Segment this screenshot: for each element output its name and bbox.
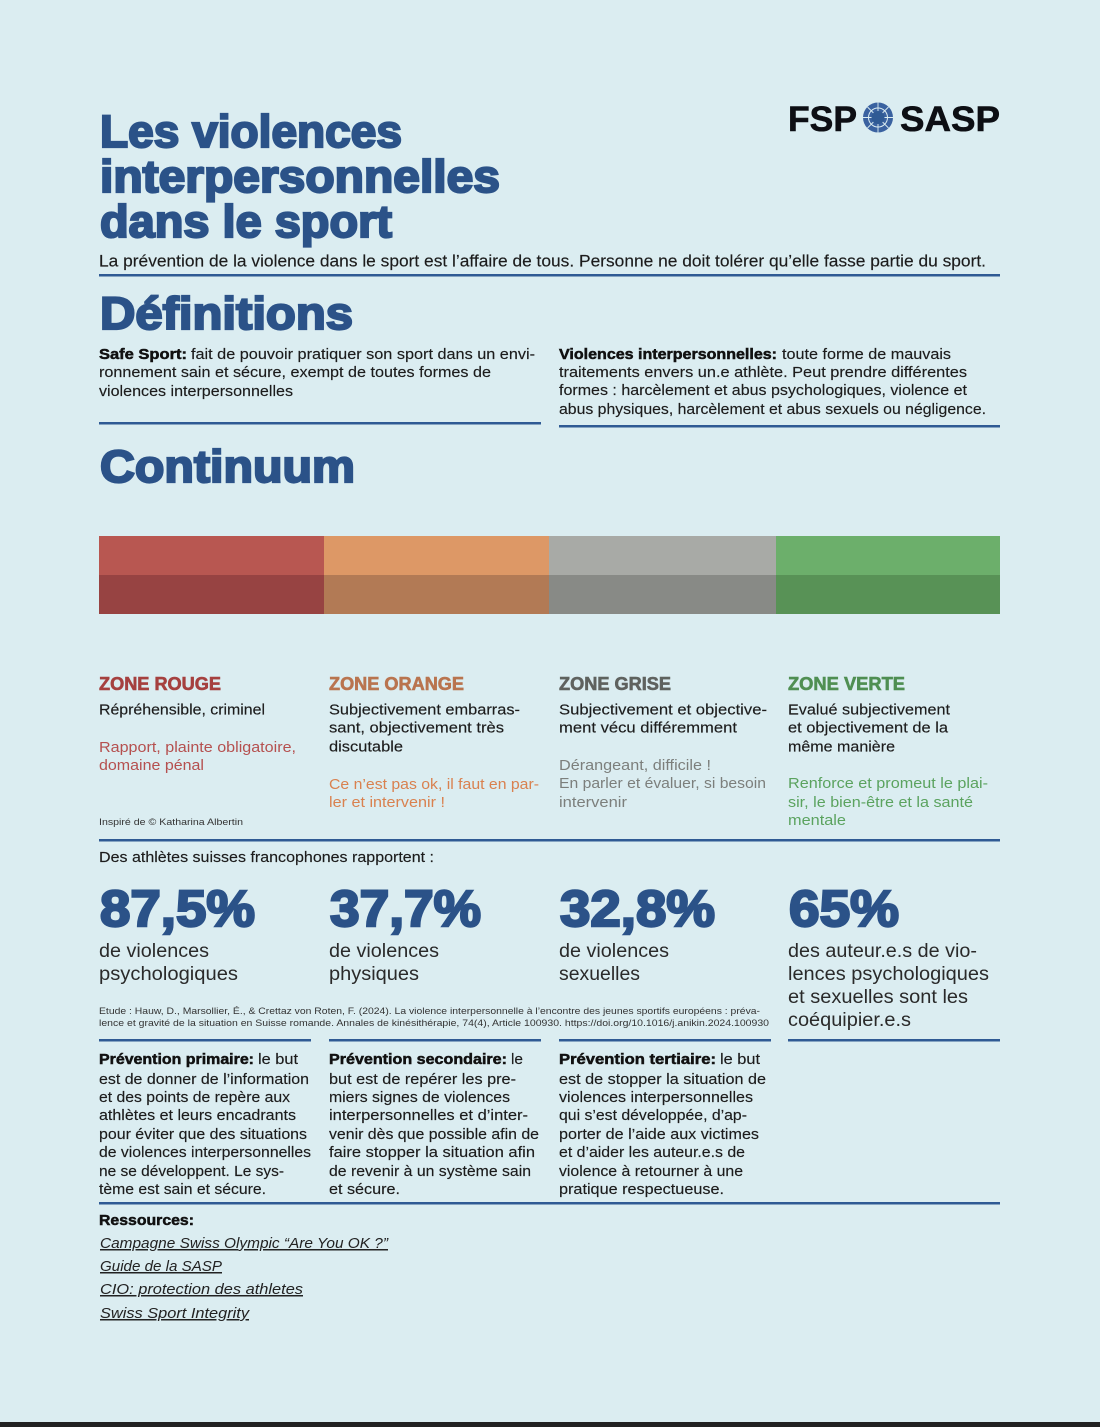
- stat: 65%: lences psychologiques: [788, 964, 989, 985]
- prévention secondaire: le: [511, 1051, 523, 1068]
- continuum colour bar: [99, 536, 1000, 614]
- stat: 65%: et sexuelles sont les: [788, 987, 968, 1008]
- stat: 65%: 65%: [789, 880, 899, 937]
- definition: Violences interpersonnelles: [559, 346, 986, 418]
- definition: Safe Sport: ronnement sain et sécure, exempt de toutes formes de: [99, 364, 491, 381]
- zone verte: même manière: [788, 738, 895, 756]
- stat: 87,5%: psychologiques: [99, 964, 238, 985]
- heading: Définitions: Définitions: [100, 288, 353, 339]
- zone rouge: Rapport, plainte obligatoire,: [99, 739, 296, 756]
- zone verte: et objectivement de la: [788, 720, 949, 736]
- definition: Violences interpersonnelles: formes : harcèlement et abus psychologiques, violence et: [559, 382, 968, 399]
- title: interpersonnelles: [100, 151, 500, 202]
- definition: Safe Sport: violences interpersonnelles: [99, 383, 293, 400]
- zone rouge: ZONE ROUGE: [99, 674, 221, 694]
- zone rouge: [99, 674, 296, 774]
- stat: 65%: coéquipier.e.s: [788, 1010, 911, 1031]
- resources: Ressources:: [99, 1212, 194, 1229]
- definition: Safe Sport: [99, 346, 535, 400]
- stat: 65%: des auteur.e.s de vio-: [788, 941, 977, 962]
- resources: Campagne Swiss Olympic “Are You OK ?”: [100, 1235, 389, 1252]
- zone verte: mentale: [788, 812, 846, 829]
- prévention tertiaire: et d’aider les auteur.e.s de: [559, 1144, 745, 1161]
- prévention secondaire: [329, 1051, 539, 1198]
- statistics intro: Des athlètes suisses francophones rapportent :: [99, 849, 434, 866]
- prévention tertiaire: [559, 1051, 766, 1198]
- resources: [99, 1212, 389, 1322]
- resources: Swiss Sport Integrity: [100, 1305, 251, 1322]
- zone verte: Evalué subjectivement: [788, 702, 951, 718]
- stat: 37,7%: 37,7%: [330, 880, 481, 937]
- title: Les violences: [100, 106, 402, 157]
- zone verte: ZONE VERTE: [788, 674, 905, 694]
- subtitle: La prévention de la violence dans le sport est l’affaire de tous. Personne ne doit tolérer qu’elle fasse partie du sport.: [99, 252, 986, 270]
- study citation: lence et gravité de la situation en Suisse romande. Annales de kinésithérapie, 74(4), Article 100930. https://doi.org/10.1016/j.anikin.2024.100930: [99, 1018, 769, 1029]
- zone orange: Subjectivement embarras-: [329, 702, 520, 718]
- prévention tertiaire: Prévention tertiaire:: [559, 1051, 716, 1068]
- zone verte: [788, 674, 988, 829]
- credit: Inspiré de © Katharina Albertin: [99, 817, 243, 828]
- prévention tertiaire: est de stopper la situation de: [559, 1071, 766, 1088]
- prévention primaire: Prévention primaire:: [99, 1051, 254, 1068]
- stat: 32,8%: 32,8%: [560, 880, 715, 937]
- heading: Continuum: Continuum: [100, 441, 355, 492]
- zone verte: Renforce et promeut le plai-: [788, 775, 988, 792]
- prévention primaire: tème est sain et sécure.: [99, 1181, 266, 1198]
- prévention secondaire: et sécure.: [329, 1181, 400, 1198]
- logo: FSP SASP: FSP: [788, 100, 857, 139]
- definition: Safe Sport: Safe Sport:: [99, 346, 187, 363]
- study citation: Etude : Hauw, D., Marsollier, É., & Crettaz von Roten, F. (2024). La violence interpersonnelle à l’encontre des jeunes sportifs européens : préva-: [99, 1006, 760, 1017]
- prévention tertiaire: le but: [720, 1051, 761, 1068]
- logo: FSP SASP: [788, 100, 1000, 139]
- title: dans le sport: [100, 196, 392, 247]
- zone rouge: domaine pénal: [99, 757, 204, 774]
- prévention primaire: ne se développent. Le sys-: [99, 1163, 284, 1180]
- prévention secondaire: de revenir à un système sain: [329, 1163, 531, 1180]
- prévention tertiaire: pratique respectueuse.: [559, 1181, 724, 1198]
- prévention secondaire: faire stopper la situation afin: [329, 1144, 535, 1161]
- prévention tertiaire: qui s’est développée, d’ap-: [559, 1107, 747, 1124]
- zone grise: [559, 674, 767, 811]
- prévention secondaire: Prévention secondaire:: [329, 1051, 507, 1068]
- prévention primaire: pour éviter que des situations: [99, 1126, 307, 1143]
- prévention primaire: athlètes et leurs encadrants: [99, 1107, 296, 1124]
- prévention secondaire: venir dès que possible afin de: [329, 1126, 539, 1143]
- prévention secondaire: interpersonnelles et d’inter-: [329, 1107, 528, 1124]
- zone orange: [329, 674, 539, 811]
- stat: 65%: [788, 880, 989, 1031]
- zone grise: En parler et évaluer, si besoin: [559, 775, 766, 792]
- prévention primaire: est de donner de l’information: [99, 1071, 309, 1088]
- prévention tertiaire: porter de l’aide aux victimes: [559, 1126, 759, 1143]
- zone orange: ZONE ORANGE: [329, 674, 464, 694]
- zone verte: sir, le bien-être et la santé: [788, 794, 973, 811]
- zone grise: Dérangeant, difficile !: [559, 757, 711, 774]
- definition: Violences interpersonnelles: abus physiques, harcèlement et abus sexuels ou négligence.: [559, 401, 986, 418]
- resources: Guide de la SASP: [100, 1258, 222, 1275]
- stat: 37,7%: de violences: [329, 941, 439, 962]
- stat: 32,8%: sexuelles: [559, 964, 640, 985]
- stat: 37,7%: physiques: [329, 964, 419, 985]
- prévention tertiaire: violences interpersonnelles: [559, 1089, 753, 1106]
- title: [100, 106, 500, 247]
- stat: 87,5%: [99, 880, 255, 985]
- prévention secondaire: miers signes de violences: [329, 1089, 510, 1106]
- definition: Safe Sport: fait de pouvoir pratiquer son sport dans un envi-: [191, 346, 535, 363]
- zone grise: ment vécu différemment: [559, 720, 738, 736]
- prévention primaire: [99, 1051, 311, 1198]
- prévention primaire: de violences interpersonnelles: [99, 1144, 311, 1161]
- stat: 87,5%: 87,5%: [100, 880, 255, 937]
- zone rouge: Répréhensible, criminel: [99, 702, 265, 718]
- stat: 37,7%: [329, 880, 481, 985]
- prévention tertiaire: violence à retourner à une: [559, 1163, 743, 1180]
- resources: CIO: protection des athletes: [100, 1281, 304, 1298]
- zone grise: ZONE GRISE: [559, 674, 671, 694]
- prévention primaire: le but: [258, 1051, 299, 1068]
- zone orange: sant, objectivement très: [329, 720, 504, 736]
- zone grise: Subjectivement et objective-: [559, 702, 767, 718]
- stat: 87,5%: de violences: [99, 941, 209, 962]
- definition: Violences interpersonnelles: Violences interpersonnelles:: [559, 346, 777, 363]
- logo: FSP SASP: SASP: [900, 100, 1000, 139]
- study citation: [99, 1006, 769, 1029]
- definition: Violences interpersonnelles: toute forme de mauvais: [782, 346, 951, 363]
- zone orange: Ce n’est pas ok, il faut en par-: [329, 776, 539, 793]
- zone orange: discutable: [329, 738, 403, 756]
- zone grise: intervenir: [559, 794, 627, 811]
- prévention secondaire: but est de repérer les pre-: [329, 1071, 516, 1088]
- stat: 32,8%: [559, 880, 715, 985]
- zone orange: ler et intervenir !: [329, 794, 445, 811]
- stat: 32,8%: de violences: [559, 941, 669, 962]
- prévention primaire: et des points de repère aux: [99, 1089, 291, 1106]
- definition: Violences interpersonnelles: traitements envers un.e athlète. Peut prendre différentes: [559, 364, 967, 381]
